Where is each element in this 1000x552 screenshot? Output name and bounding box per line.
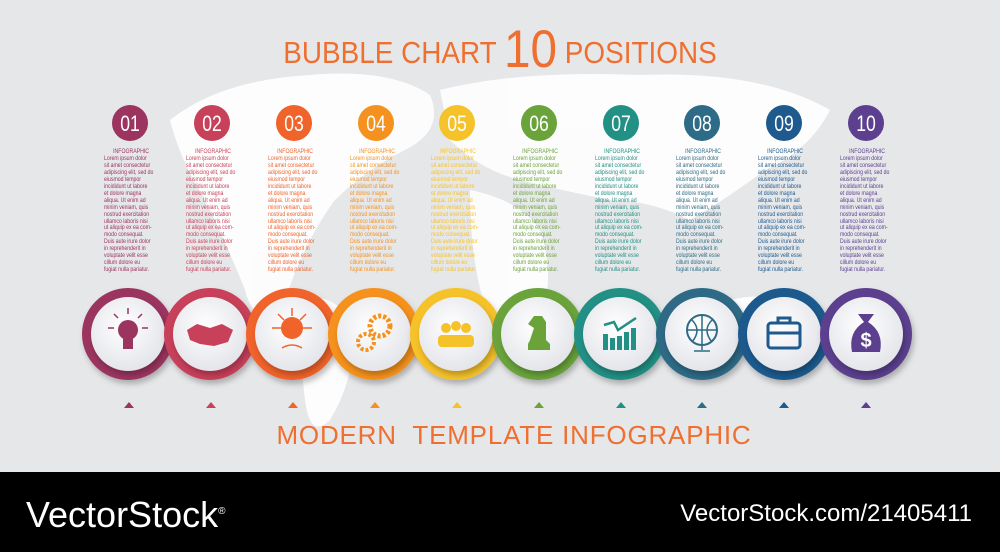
text column 03: ullamco laboris nisi (268, 218, 312, 225)
text column 01: nostrud exercitation (104, 211, 149, 218)
bubble 10 money bag: $ (860, 330, 872, 352)
text column 05: incididunt ut labore (431, 183, 474, 190)
text column 07: cillum dolore eu (595, 259, 631, 266)
text column 04: cillum dolore eu (350, 259, 386, 266)
text column 08: et dolore magna (676, 190, 713, 197)
text column 06: eiusmod tempor (513, 176, 550, 183)
text column 06: voluptate velit esse (513, 252, 557, 259)
text column 04 (350, 148, 400, 273)
text column 03: fugiat nulla pariatur. (268, 266, 313, 273)
text column 09: minim veniam, quis (758, 204, 802, 211)
text column 10: in reprehenderit in (840, 245, 882, 252)
text column 04: Duis aute irure dolor (350, 238, 396, 245)
text column 03: et dolore magna (268, 190, 305, 197)
text column 05: cillum dolore eu (431, 259, 467, 266)
bubble 04 gears (328, 288, 420, 380)
text column 06: INFOGRAPHIC (522, 148, 558, 155)
text column 04: incididunt ut labore (350, 183, 393, 190)
bubble row (81, 288, 917, 408)
badge 02: 02 (202, 112, 222, 137)
text column 02: voluptate velit esse (186, 252, 230, 259)
text column 02: adipiscing elit, sed do (186, 169, 235, 176)
text column 02: minim veniam, quis (186, 204, 230, 211)
badge 03 (276, 105, 312, 141)
text column 03: ut aliquip ex ea com- (268, 224, 316, 231)
text column 04: sit amet consectetur (350, 162, 396, 169)
text column 05: nostrud exercitation (431, 211, 476, 218)
text column 02: eiusmod tempor (186, 176, 223, 183)
text column 07: et dolore magna (595, 190, 632, 197)
text column 04: Lorem ipsum dolor (350, 155, 393, 162)
text column 07: Duis aute irure dolor (595, 238, 641, 245)
text column 01: incididunt ut labore (104, 183, 147, 190)
text column 10: sit amet consectetur (840, 162, 886, 169)
badge 01: 01 (120, 112, 140, 137)
text column 03: in reprehenderit in (268, 245, 310, 252)
text column 01: minim veniam, quis (104, 204, 148, 211)
text column 02: INFOGRAPHIC (195, 148, 231, 155)
text column 07: minim veniam, quis (595, 204, 639, 211)
text column 07: adipiscing elit, sed do (595, 169, 644, 176)
bubble 06 chess (492, 288, 584, 380)
bubble 05 people (410, 288, 502, 380)
text column 08: aliqua. Ut enim ad (676, 197, 718, 204)
text column 06: ut aliquip ex ea com- (513, 224, 561, 231)
text column 07: voluptate velit esse (595, 252, 639, 259)
text column 02: fugiat nulla pariatur. (186, 266, 231, 273)
text column 03: modo consequat. (268, 231, 308, 238)
text column 04: adipiscing elit, sed do (350, 169, 399, 176)
text column 09: voluptate velit esse (758, 252, 802, 259)
pointer triangles (124, 402, 871, 408)
text column 09: adipiscing elit, sed do (758, 169, 807, 176)
text column 04: ullamco laboris nisi (350, 218, 394, 225)
text column 07: ullamco laboris nisi (595, 218, 639, 225)
text column 07: modo consequat. (595, 231, 635, 238)
text column 07: in reprehenderit in (595, 245, 637, 252)
text column 04: minim veniam, quis (350, 204, 394, 211)
text column 05: sit amet consectetur (431, 162, 477, 169)
text column 01: modo consequat. (104, 231, 144, 238)
text column 06: minim veniam, quis (513, 204, 557, 211)
text column 01: ullamco laboris nisi (104, 218, 148, 225)
text column 06: incididunt ut labore (513, 183, 556, 190)
badge 04 (358, 105, 394, 141)
text column 05: et dolore magna (431, 190, 468, 197)
badge 10 (848, 105, 884, 141)
text column 07 (595, 148, 644, 273)
text column 09: ut aliquip ex ea com- (758, 224, 806, 231)
text column 05: eiusmod tempor (431, 176, 468, 183)
badge 09: 09 (774, 112, 794, 137)
footer logo: VectorStock® (26, 494, 225, 535)
text column 04: voluptate velit esse (350, 252, 394, 259)
text column 03: sit amet consectetur (268, 162, 314, 169)
text column 05: fugiat nulla pariatur. (431, 266, 476, 273)
bubble 10 money bag (820, 288, 912, 380)
text column 05: Lorem ipsum dolor (431, 155, 474, 162)
text column 10: Lorem ipsum dolor (840, 155, 883, 162)
text column 08: minim veniam, quis (676, 204, 720, 211)
footer bar (0, 472, 1000, 552)
text column 02: in reprehenderit in (186, 245, 228, 252)
text column 10: ullamco laboris nisi (840, 218, 884, 225)
text column 01: fugiat nulla pariatur. (104, 266, 149, 273)
text column 08: voluptate velit esse (676, 252, 720, 259)
text column 10: minim veniam, quis (840, 204, 884, 211)
text column 07: aliqua. Ut enim ad (595, 197, 637, 204)
bubble 02 handshake (164, 288, 256, 380)
text column 09: sit amet consectetur (758, 162, 804, 169)
text column 02: ut aliquip ex ea com- (186, 224, 234, 231)
text column 05: Duis aute irure dolor (431, 238, 477, 245)
text column 06: Duis aute irure dolor (513, 238, 559, 245)
badge 08 (684, 105, 720, 141)
text column 01: Duis aute irure dolor (104, 238, 150, 245)
text column 08: eiusmod tempor (676, 176, 713, 183)
text column 04: aliqua. Ut enim ad (350, 197, 392, 204)
text column 06: cillum dolore eu (513, 259, 549, 266)
badge 08: 08 (692, 112, 712, 137)
text column 06: fugiat nulla pariatur. (513, 266, 558, 273)
text column 06: et dolore magna (513, 190, 550, 197)
text column 04: in reprehenderit in (350, 245, 392, 252)
text column 03: Duis aute irure dolor (268, 238, 314, 245)
text column 03: nostrud exercitation (268, 211, 313, 218)
text column 09: cillum dolore eu (758, 259, 794, 266)
text column 02: Duis aute irure dolor (186, 238, 232, 245)
text column 09: incididunt ut labore (758, 183, 801, 190)
badge 03: 03 (284, 112, 304, 137)
text column 10: et dolore magna (840, 190, 877, 197)
text column 08: cillum dolore eu (676, 259, 712, 266)
text column 10: voluptate velit esse (840, 252, 884, 259)
text column 02: ullamco laboris nisi (186, 218, 230, 225)
text column 07: eiusmod tempor (595, 176, 632, 183)
text column 10: aliqua. Ut enim ad (840, 197, 882, 204)
badge 04: 04 (366, 112, 386, 137)
number badges (112, 105, 884, 141)
text column 10 (840, 148, 890, 273)
text column 04: eiusmod tempor (350, 176, 387, 183)
text column 06: sit amet consectetur (513, 162, 559, 169)
bubble 01 lightbulb (82, 288, 174, 380)
badge 02 (194, 105, 230, 141)
text column 05: aliqua. Ut enim ad (431, 197, 473, 204)
text column 02: aliqua. Ut enim ad (186, 197, 228, 204)
text column 08: incididunt ut labore (676, 183, 719, 190)
text column 08 (676, 148, 726, 273)
text column 06: ullamco laboris nisi (513, 218, 557, 225)
text column 08: adipiscing elit, sed do (676, 169, 725, 176)
text column 03: incididunt ut labore (268, 183, 311, 190)
text column 01: adipiscing elit, sed do (104, 169, 153, 176)
text column 03 (268, 148, 318, 273)
bubble 09 briefcase (738, 288, 830, 380)
badge 06 (521, 105, 557, 141)
text column 06: modo consequat. (513, 231, 553, 238)
text column 02: et dolore magna (186, 190, 223, 197)
text column 08: fugiat nulla pariatur. (676, 266, 721, 273)
text column 07: ut aliquip ex ea com- (595, 224, 643, 231)
text column 01: INFOGRAPHIC (113, 148, 149, 155)
text column 10: cillum dolore eu (840, 259, 876, 266)
text column 09: eiusmod tempor (758, 176, 795, 183)
text column 10: ut aliquip ex ea com- (840, 224, 888, 231)
text column 01: cillum dolore eu (104, 259, 140, 266)
text column 01: et dolore magna (104, 190, 141, 197)
text column 01: sit amet consectetur (104, 162, 150, 169)
text column 07: incididunt ut labore (595, 183, 638, 190)
text column 09: in reprehenderit in (758, 245, 800, 252)
text column 09: aliqua. Ut enim ad (758, 197, 800, 204)
text column 05: in reprehenderit in (431, 245, 473, 252)
text column 09: nostrud exercitation (758, 211, 803, 218)
text column 03: adipiscing elit, sed do (268, 169, 317, 176)
text column 08: nostrud exercitation (676, 211, 721, 218)
text column 02: Lorem ipsum dolor (186, 155, 229, 162)
text column 01: voluptate velit esse (104, 252, 148, 259)
text column 08: Duis aute irure dolor (676, 238, 722, 245)
text column 02: cillum dolore eu (186, 259, 222, 266)
text column 07: INFOGRAPHIC (604, 148, 640, 155)
text column 08: sit amet consectetur (676, 162, 722, 169)
text column 06: nostrud exercitation (513, 211, 558, 218)
text column 02: incididunt ut labore (186, 183, 229, 190)
text column 09: fugiat nulla pariatur. (758, 266, 803, 273)
text column 04: fugiat nulla pariatur. (350, 266, 395, 273)
text column 07: sit amet consectetur (595, 162, 641, 169)
text column 09: Duis aute irure dolor (758, 238, 804, 245)
text column 01: Lorem ipsum dolor (104, 155, 147, 162)
text column 06 (513, 148, 562, 273)
text column 04: ut aliquip ex ea com- (350, 224, 398, 231)
text column 06: in reprehenderit in (513, 245, 555, 252)
text column 09: INFOGRAPHIC (767, 148, 803, 155)
text column 08: in reprehenderit in (676, 245, 718, 252)
text column 04: et dolore magna (350, 190, 387, 197)
subtitle: MODERN TEMPLATE INFOGRAPHIC (276, 420, 752, 450)
text column 08: Lorem ipsum dolor (676, 155, 719, 162)
text column 02 (186, 148, 236, 273)
text column 09: et dolore magna (758, 190, 795, 197)
text column 09 (758, 148, 808, 273)
text column 03: cillum dolore eu (268, 259, 304, 266)
text column 08: ullamco laboris nisi (676, 218, 720, 225)
text column 06: aliqua. Ut enim ad (513, 197, 555, 204)
badge 01 (112, 105, 148, 141)
badge 09 (766, 105, 802, 141)
text column 03: voluptate velit esse (268, 252, 312, 259)
text column 10: nostrud exercitation (840, 211, 885, 218)
text column 10: modo consequat. (840, 231, 880, 238)
text column 01: eiusmod tempor (104, 176, 141, 183)
badge 07: 07 (611, 112, 631, 137)
text column 03: minim veniam, quis (268, 204, 312, 211)
text column 05: adipiscing elit, sed do (431, 169, 480, 176)
text column 09: Lorem ipsum dolor (758, 155, 801, 162)
bubble 03 rocket (246, 288, 338, 380)
text column 10: Duis aute irure dolor (840, 238, 886, 245)
text column 07: fugiat nulla pariatur. (595, 266, 640, 273)
text column 06: Lorem ipsum dolor (513, 155, 556, 162)
text column 10: INFOGRAPHIC (849, 148, 885, 155)
badge 06: 06 (529, 112, 549, 137)
bubble 08 globe (656, 288, 748, 380)
text column 05 (431, 148, 480, 273)
text column 05: modo consequat. (431, 231, 471, 238)
text column 03: aliqua. Ut enim ad (268, 197, 310, 204)
text column 07: nostrud exercitation (595, 211, 640, 218)
text column 02: nostrud exercitation (186, 211, 231, 218)
badge 07 (603, 105, 639, 141)
text column 07: Lorem ipsum dolor (595, 155, 638, 162)
text column 08: modo consequat. (676, 231, 716, 238)
text column 05: voluptate velit esse (431, 252, 475, 259)
text column 02: sit amet consectetur (186, 162, 232, 169)
text column 05: INFOGRAPHIC (440, 148, 476, 155)
text column 03: eiusmod tempor (268, 176, 305, 183)
text column 01: in reprehenderit in (104, 245, 146, 252)
text column 10: adipiscing elit, sed do (840, 169, 889, 176)
text column 01: aliqua. Ut enim ad (104, 197, 146, 204)
text column 10: incididunt ut labore (840, 183, 883, 190)
text column 06: adipiscing elit, sed do (513, 169, 562, 176)
footer id: VectorStock.com/21405411 (680, 500, 972, 527)
text column 04: INFOGRAPHIC (359, 148, 395, 155)
text column 08: INFOGRAPHIC (685, 148, 721, 155)
text column 01 (104, 148, 154, 273)
text column 04: modo consequat. (350, 231, 390, 238)
text column 04: nostrud exercitation (350, 211, 395, 218)
text column 05: ullamco laboris nisi (431, 218, 475, 225)
bubble 07 chart (574, 288, 666, 380)
text column 03: INFOGRAPHIC (277, 148, 313, 155)
text column 05: minim veniam, quis (431, 204, 475, 211)
badge 05 (439, 105, 475, 141)
text column 02: modo consequat. (186, 231, 226, 238)
badge 10: 10 (856, 112, 876, 137)
text column 10: fugiat nulla pariatur. (840, 266, 885, 273)
text column 03: Lorem ipsum dolor (268, 155, 311, 162)
title: BUBBLE CHART 10 POSITIONS (283, 20, 717, 79)
text column 09: modo consequat. (758, 231, 798, 238)
text column 08: ut aliquip ex ea com- (676, 224, 724, 231)
text column 05: ut aliquip ex ea com- (431, 224, 479, 231)
badge 05: 05 (447, 112, 467, 137)
text column 01: ut aliquip ex ea com- (104, 224, 152, 231)
text column 10: eiusmod tempor (840, 176, 877, 183)
text column 09: ullamco laboris nisi (758, 218, 802, 225)
